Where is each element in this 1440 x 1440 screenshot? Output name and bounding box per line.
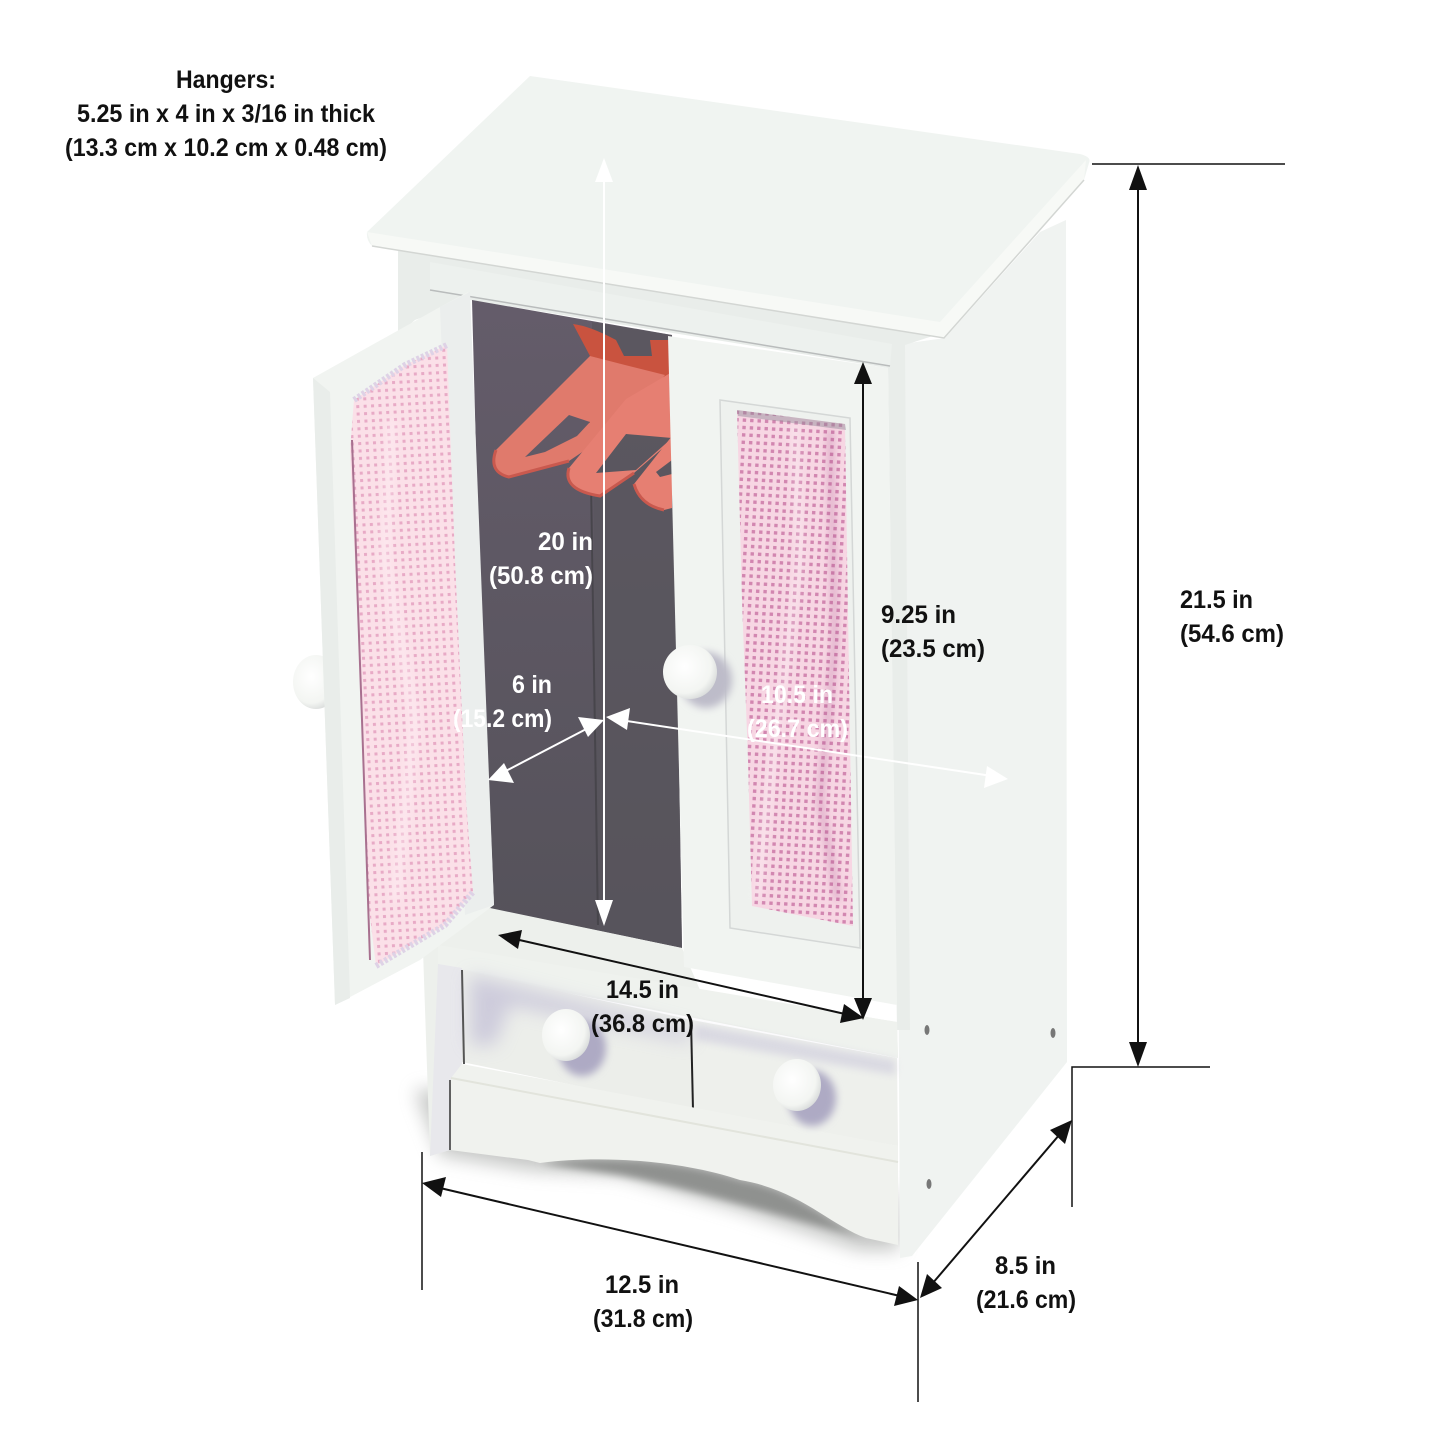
label: 12.5 in: 12.5 in xyxy=(605,1271,679,1299)
arrow: 21.5 in overall height xyxy=(1072,164,1285,1207)
label: 6 in xyxy=(453,671,552,733)
left drawer xyxy=(462,970,693,1110)
label: 21.5 in xyxy=(1180,586,1284,648)
upper frame xyxy=(398,240,945,1030)
arrow: 14.5 in shelf width xyxy=(498,930,864,1023)
arrow: 20 in interior height xyxy=(595,158,613,926)
drawer knobs xyxy=(542,1009,836,1126)
window frame xyxy=(720,400,860,948)
arrow: 8.5 in overall depth xyxy=(920,1120,1072,1298)
arrow: 9.25 in door height xyxy=(854,362,872,1020)
label: 21.5 in: (54.6 cm) xyxy=(1180,620,1284,648)
text: hangers dimensions: Hangers: xyxy=(176,66,276,94)
label: 20 in: (50.8 cm) xyxy=(489,562,593,590)
right drawer xyxy=(692,1020,898,1146)
text: hangers dimensions: 5.25 in x 4 in x 3/16 in thick xyxy=(77,100,375,128)
arrow: 10.5 in interior width xyxy=(606,708,1008,788)
door knob xyxy=(680,652,732,708)
pink hangers xyxy=(494,324,672,510)
label: 12.5 in xyxy=(593,1271,693,1333)
label: 8.5 in: (21.6 cm) xyxy=(976,1286,1076,1314)
left curtain xyxy=(350,345,473,966)
lower frame and shelf xyxy=(423,908,898,1156)
label: 14.5 in xyxy=(591,976,694,1038)
outer knob xyxy=(293,655,339,709)
right curtain xyxy=(737,410,853,926)
arrow: 12.5 in overall width xyxy=(422,1152,918,1402)
right door xyxy=(663,336,897,1005)
arrow: 6 in interior depth xyxy=(488,717,604,783)
label: 8.5 in xyxy=(976,1252,1076,1314)
left door xyxy=(293,292,494,1005)
label: 20 in xyxy=(489,528,593,590)
label: 12.5 in: (31.8 cm) xyxy=(593,1305,693,1333)
base plinth xyxy=(450,1064,898,1245)
label: 21.5 in: 21.5 in xyxy=(1180,586,1253,614)
armoire side panel xyxy=(895,220,1067,1258)
label: 10.5 in xyxy=(747,681,848,743)
label: 14.5 in: (36.8 cm) xyxy=(591,1010,694,1038)
screw holes xyxy=(924,1025,1056,1189)
label: 9.25 in: (23.5 cm) xyxy=(881,635,985,663)
label: 9.25 in: 9.25 in xyxy=(881,601,956,629)
text: hangers dimensions xyxy=(65,66,387,162)
label: 20 in: 20 in xyxy=(538,528,593,556)
label: 14.5 in: 14.5 in xyxy=(606,976,679,1004)
drawer shading xyxy=(470,975,690,1045)
label: 10.5 in: 10.5 in xyxy=(761,681,833,709)
floor shadow xyxy=(415,1090,900,1250)
label: 9.25 in xyxy=(881,601,985,663)
text: hangers dimensions: (13.3 cm x 10.2 cm x 0.48 cm) xyxy=(65,134,387,162)
label: 6 in: 6 in xyxy=(512,671,552,699)
label: 10.5 in: (26.7 cm) xyxy=(747,715,848,743)
label: 6 in: (15.2 cm) xyxy=(453,705,552,733)
drawers xyxy=(462,970,898,1146)
top panel xyxy=(367,76,1090,338)
label: 8.5 in: 8.5 in xyxy=(995,1252,1056,1280)
interior back wall xyxy=(472,300,682,948)
